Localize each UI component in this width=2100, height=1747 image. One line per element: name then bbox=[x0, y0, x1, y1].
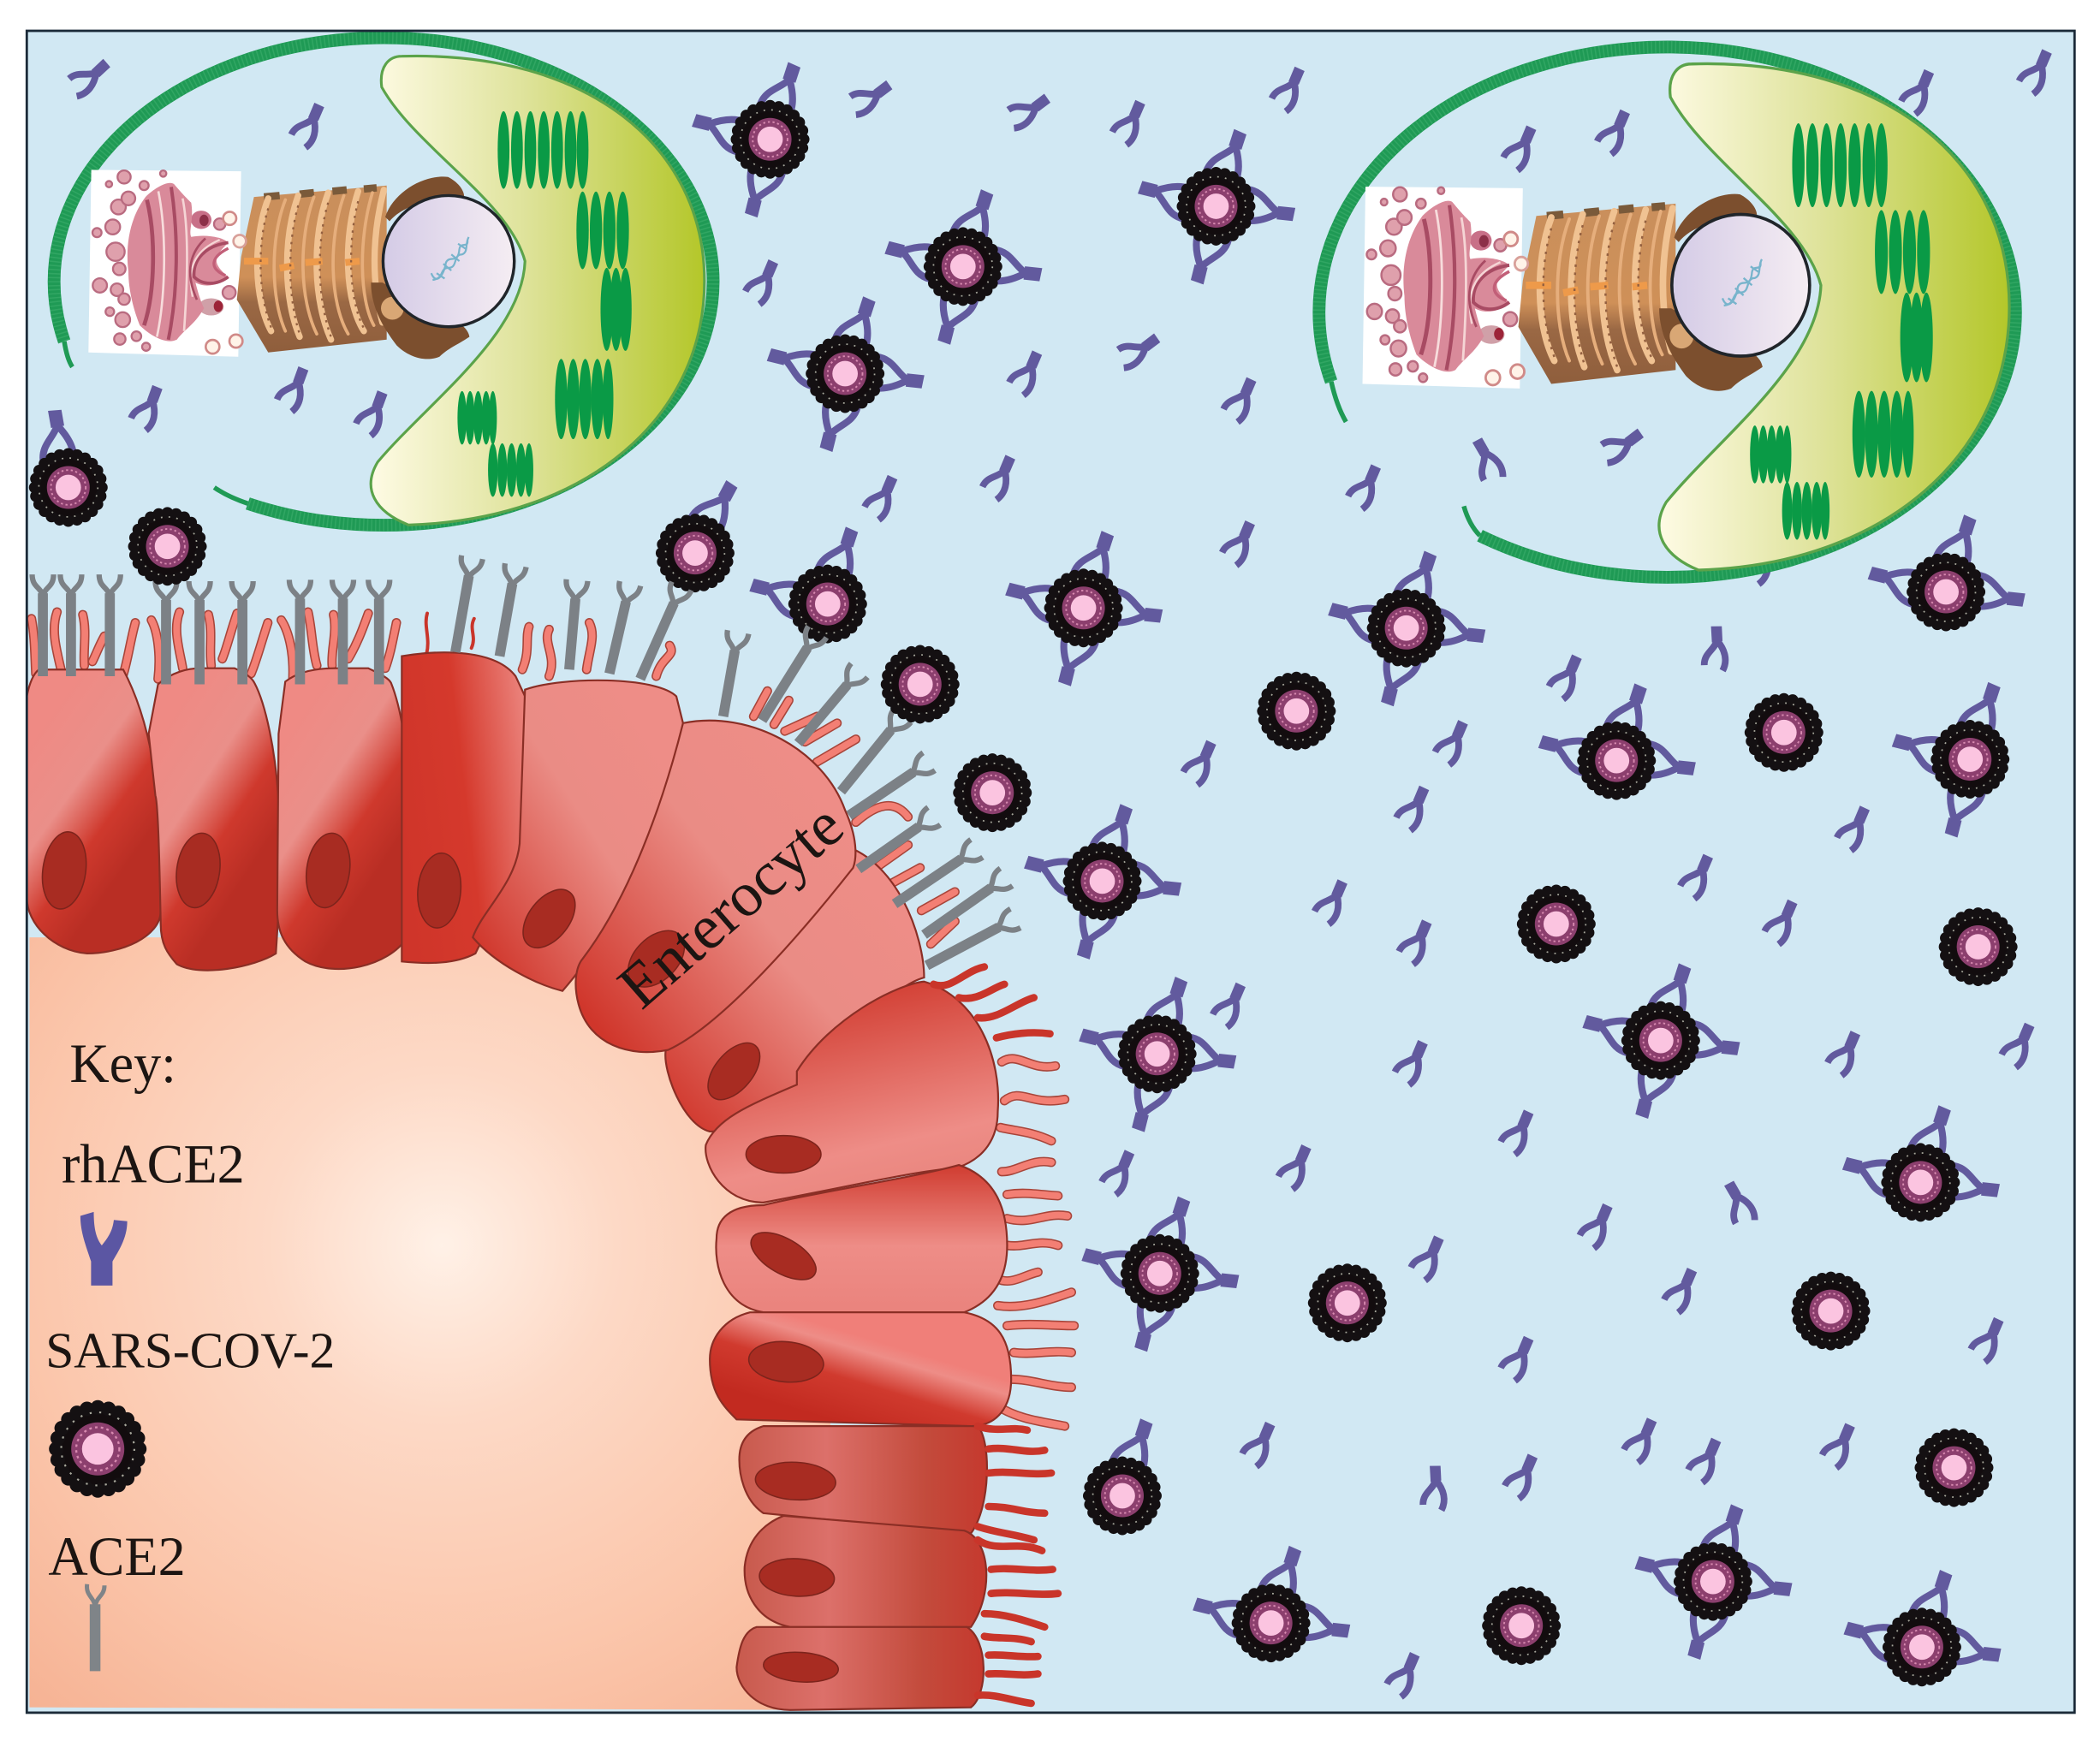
green cell wall left bbox=[54, 38, 713, 526]
plant cell right bbox=[1319, 47, 2015, 577]
cell 13 bbox=[736, 1627, 984, 1710]
cell 6 bbox=[575, 721, 855, 1052]
cell 5 bbox=[473, 680, 683, 991]
cell 11 bbox=[740, 1426, 987, 1533]
cell 1 bbox=[27, 669, 161, 954]
key heading: Key: bbox=[69, 1033, 176, 1094]
enterocyte cell row bbox=[27, 652, 1011, 1710]
green cell wall right bbox=[1319, 47, 2015, 577]
intestinal lumen tissue bbox=[29, 937, 830, 1710]
key label: SARS-COV-2: SARS-COV-2 bbox=[45, 1322, 335, 1378]
cell 12 bbox=[745, 1516, 986, 1627]
cell 3 bbox=[277, 668, 408, 969]
chloroplast, golgi, ER and nucleus right bbox=[1363, 63, 2009, 570]
cell 10 bbox=[710, 1312, 1011, 1426]
cell 4 bbox=[402, 652, 527, 963]
cell 9 bbox=[716, 1165, 1007, 1312]
cell 7 bbox=[643, 844, 924, 1132]
cell 2 bbox=[149, 668, 278, 971]
cell 8 bbox=[705, 982, 998, 1203]
chloroplast, golgi, ER and nucleus left bbox=[88, 56, 705, 525]
key label: rhACE2: rhACE2 bbox=[62, 1133, 245, 1194]
dark microvilli on lower cells bbox=[933, 967, 1058, 1703]
plant cell left bbox=[54, 38, 713, 526]
cell nuclei bbox=[38, 829, 839, 1685]
rhACE2 partly hidden behind right cell bbox=[1742, 536, 1778, 585]
key icon: ACE2 bbox=[87, 1584, 104, 1671]
key icon: SARS-CoV-2 virion bbox=[49, 1400, 146, 1498]
key bbox=[45, 1033, 335, 1671]
key icon: rhACE2 bbox=[80, 1212, 128, 1286]
key label: ACE2: ACE2 bbox=[48, 1526, 186, 1587]
microvilli on light cells bbox=[32, 612, 1074, 1426]
label: Enterocyte: Enterocyte bbox=[604, 789, 856, 1021]
virions docked on ACE2 bbox=[128, 507, 1032, 832]
cell-surface ACE2 receptors bbox=[33, 556, 1020, 975]
free virions bbox=[1257, 672, 2018, 1665]
